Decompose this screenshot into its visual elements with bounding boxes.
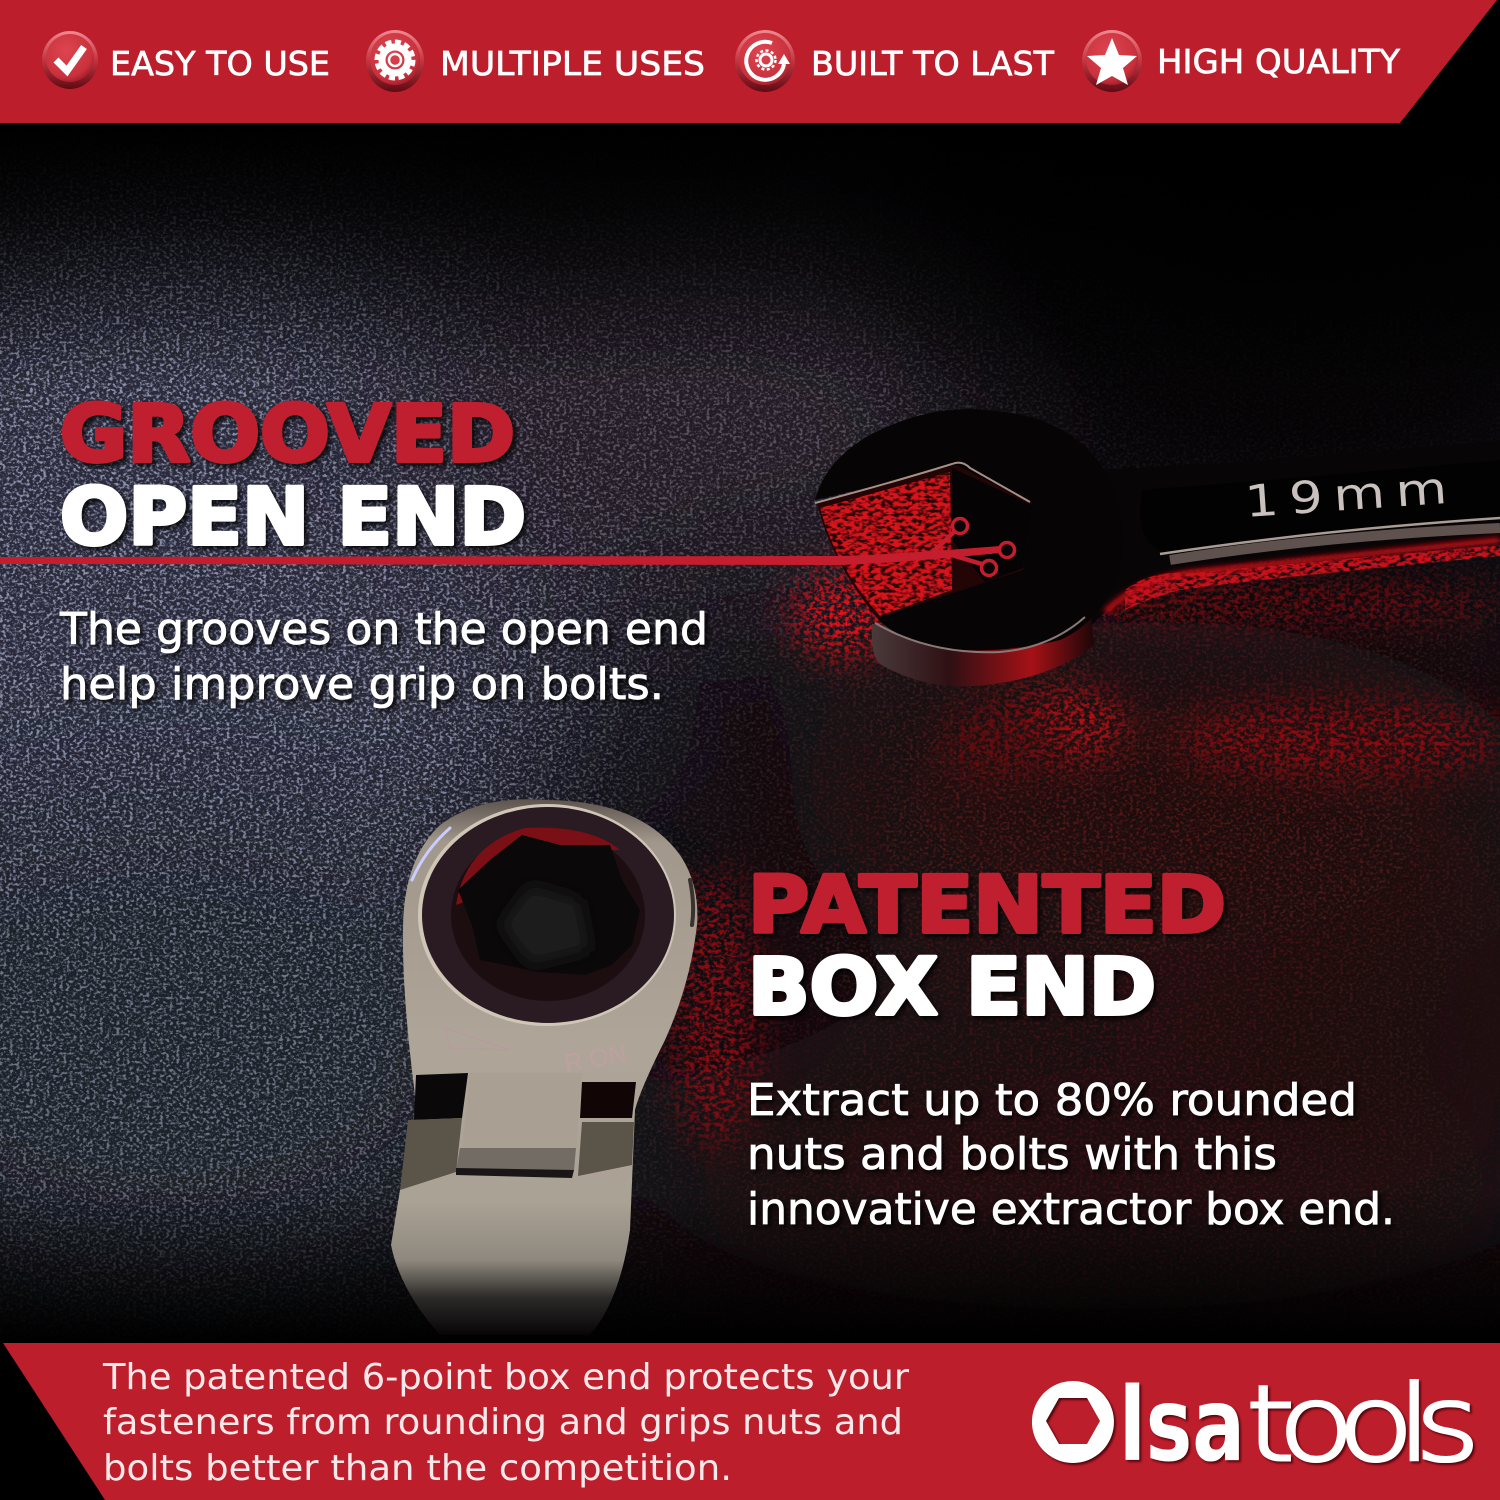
text: grooved description xyxy=(59,604,708,710)
heading: grooved open end xyxy=(60,390,526,563)
hexagonal socket xyxy=(458,835,640,975)
bottom text xyxy=(102,1357,909,1489)
badge: high quality xyxy=(1082,30,1401,92)
heading: patented box end: BOX END xyxy=(748,943,1156,1033)
logo: Olsatools: tools xyxy=(1246,1364,1472,1485)
wrench handle xyxy=(1080,440,1500,625)
heading: grooved open end: GROOVED xyxy=(60,390,515,480)
badge: multiple uses xyxy=(366,30,705,92)
heading: patented box end: PATENTED xyxy=(748,861,1226,951)
wrench size marking: 19mm xyxy=(1243,462,1459,528)
open-end wrench 19mm xyxy=(815,409,1500,687)
text: box end description: innovative extractor box end. xyxy=(747,1184,1395,1235)
hinge gaps xyxy=(400,1073,636,1190)
engraving: R ON xyxy=(562,1039,629,1078)
text: grooved description: help improve grip on bolts. xyxy=(60,659,664,710)
callout line xyxy=(0,518,1014,576)
badge: built to last: BUILT TO LAST xyxy=(811,44,1055,83)
badge: easy to use xyxy=(42,31,330,89)
ring xyxy=(418,804,676,1026)
text: grooved description: The grooves on the open end xyxy=(59,604,708,655)
text: box end description: nuts and bolts with this xyxy=(747,1129,1277,1180)
red reflection inside ring xyxy=(456,828,620,905)
bottom text: The patented 6-point box end protects your xyxy=(102,1357,909,1398)
badge: built to last xyxy=(735,30,1055,92)
top banner xyxy=(0,0,1500,124)
text: box end description xyxy=(747,1075,1395,1235)
logo: Olsatools xyxy=(1032,1364,1472,1485)
bottom text: bolts better than the competition. xyxy=(103,1448,732,1489)
heading: grooved open end: OPEN END xyxy=(60,473,526,563)
logo: Olsatools: lsa xyxy=(1119,1366,1245,1485)
metal glints xyxy=(412,828,693,970)
bottom banner xyxy=(0,1343,1500,1500)
jaw opening xyxy=(815,463,1032,618)
wrench head face xyxy=(815,409,1122,650)
box-end flex wrench xyxy=(391,799,697,1335)
box end head xyxy=(391,799,697,1335)
badge: multiple uses: MULTIPLE USES xyxy=(440,44,705,83)
text: box end description: Extract up to 80% rounded xyxy=(747,1075,1357,1126)
badge: easy to use: EASY TO USE xyxy=(110,44,330,83)
callout endpoint circles xyxy=(952,518,1014,576)
bottom text: fasteners from rounding and grips nuts and xyxy=(103,1402,903,1443)
badge: high quality: HIGH QUALITY xyxy=(1157,42,1401,81)
heading: patented box end xyxy=(748,861,1226,1033)
red light glow xyxy=(670,570,1500,1150)
lower jaw side face xyxy=(872,605,1094,687)
